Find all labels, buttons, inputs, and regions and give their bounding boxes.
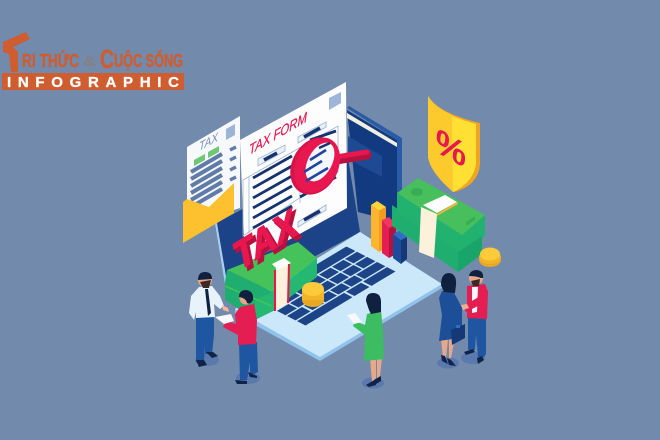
- small paper heading: TAX: [199, 129, 218, 154]
- book: [347, 106, 402, 222]
- logo: Tri Thuc & Cuoc Song Infographic: UỘC SỐNG: [114, 50, 183, 71]
- logo: Tri Thuc & Cuoc Song Infographic: C: [100, 44, 114, 74]
- big 3D TAX: TAX: [231, 199, 300, 279]
- percent sign: %: [433, 120, 469, 175]
- logo: Tri Thuc & Cuoc Song Infographic: RI THỨC: [22, 50, 79, 71]
- person: man in red sweater: [215, 290, 260, 384]
- person: man in white shirt: [189, 272, 229, 367]
- logo: Tri Thuc & Cuoc Song Infographic: INFOGRAPHIC: [7, 74, 179, 91]
- person: man in red jacket: [461, 270, 488, 364]
- left money band: [276, 264, 288, 311]
- right money band: [419, 207, 437, 258]
- laptop base: [235, 232, 442, 361]
- envelope: [183, 183, 234, 243]
- shield with percent: [428, 96, 480, 192]
- laptop screen: [215, 152, 360, 303]
- person: woman in green dress: [347, 293, 384, 388]
- small tax paper: [187, 116, 240, 225]
- laptop: [215, 152, 442, 361]
- form heading: TAX FORM: [249, 109, 307, 159]
- bar chart: [371, 201, 407, 264]
- tax form: [240, 82, 347, 264]
- person: woman in blue dress: [437, 273, 465, 368]
- logo: Tri Thuc & Cuoc Song Infographic: [2, 32, 184, 91]
- coin stack left: [302, 282, 324, 307]
- right money stack: [392, 178, 485, 272]
- magnifying glass: [281, 129, 367, 203]
- left money stack: [225, 242, 317, 320]
- logo: Tri Thuc & Cuoc Song Infographic: &: [83, 53, 96, 70]
- keyboard: [256, 246, 396, 325]
- big 3D TAX: TAX: [234, 202, 303, 282]
- coin stack right: [479, 248, 501, 267]
